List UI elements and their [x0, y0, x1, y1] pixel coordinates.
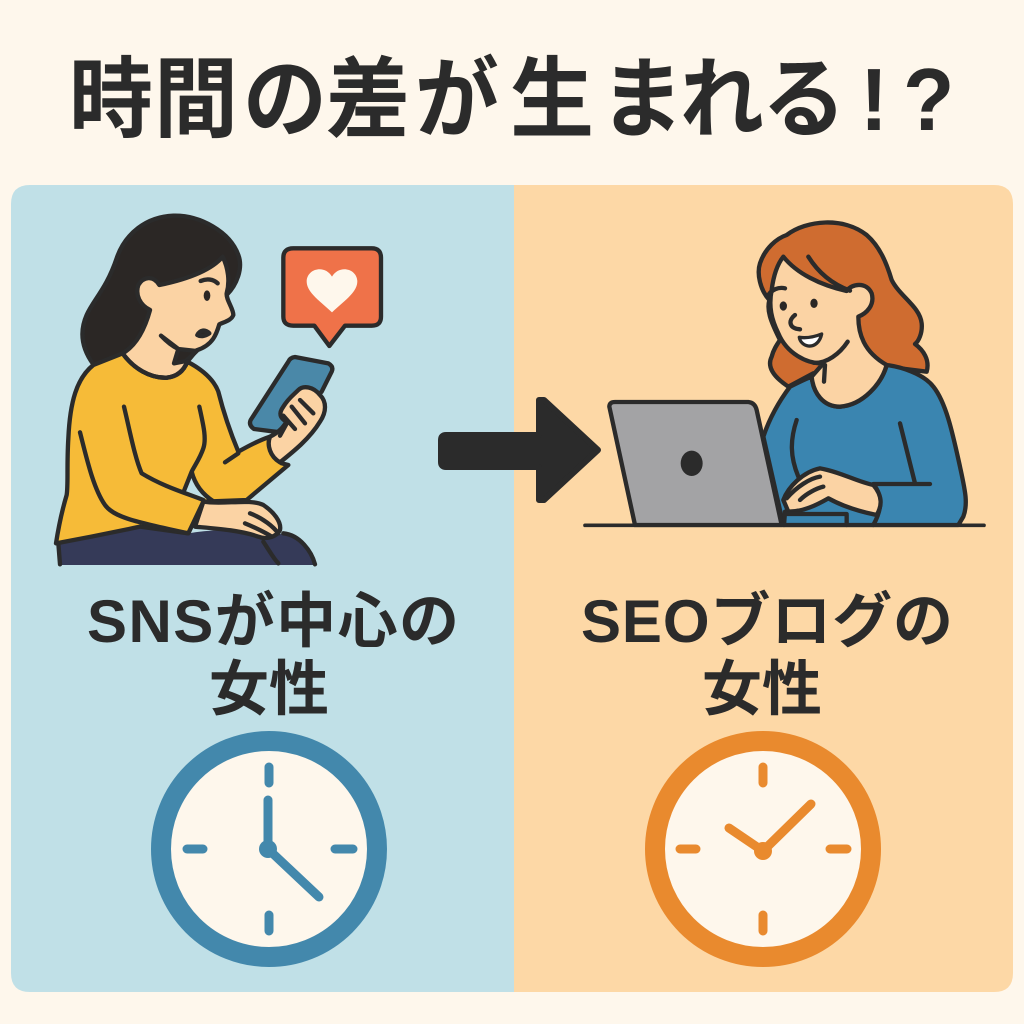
label: SNS: SNSが中心の — [87, 588, 459, 655]
illustration: woman with smartphone — [56, 216, 332, 565]
panel: SNS-centred woman — [11, 185, 514, 992]
icon: heart speech bubble — [283, 248, 381, 346]
icon: orange clock — [655, 741, 871, 957]
arrow — [441, 400, 598, 500]
illustration: woman with laptop — [585, 222, 984, 525]
icon: blue clock — [161, 741, 377, 957]
panel: SEO blog woman — [514, 185, 1013, 992]
label: woman: 女性 — [702, 656, 822, 723]
label: woman: 女性 — [209, 656, 329, 723]
title: 時間の差が生まれる!? — [69, 51, 954, 149]
label: SEO: SEOブログの — [581, 588, 953, 655]
